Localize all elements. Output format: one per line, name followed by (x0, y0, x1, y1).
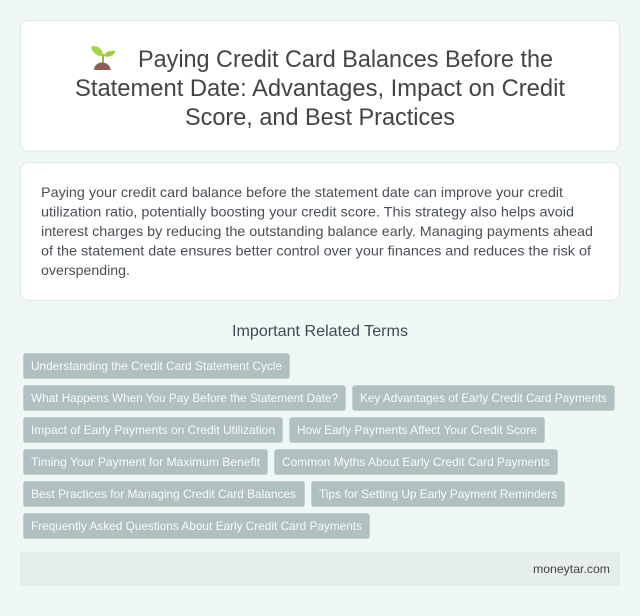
footer: moneytar.com (533, 562, 610, 576)
panel: related term tags (24, 354, 614, 538)
summary paragraph: Paying your credit card balance before the statement date can improve your credit (41, 184, 563, 200)
title: Statement Date: Advantages, Impact on Credit (75, 75, 565, 102)
tag: faq: Frequently Asked Questions About Early Credit Card Payments (31, 519, 362, 533)
summary paragraph: overspending. (41, 262, 130, 278)
tag: myths (274, 450, 558, 474)
tag: faq (24, 514, 370, 538)
summary paragraph (41, 184, 593, 278)
summary paragraph: of the statement date ensures better control over your finances and reduces the risk of (41, 242, 591, 258)
tag: timing: Timing Your Payment for Maximum Benefit (31, 455, 261, 469)
icon: seedling (91, 46, 116, 70)
tag: key advantages: Key Advantages of Early Credit Card Payments (360, 391, 607, 405)
tag: reminders (312, 482, 564, 506)
tag: reminders: Tips for Setting Up Early Payment Reminders (319, 487, 557, 501)
tag: credit score (290, 418, 544, 442)
panel: summary card (20, 162, 620, 300)
tag: best practices (24, 482, 304, 506)
tag: statement cycle: Understanding the Credit Card Statement Cycle (31, 359, 282, 373)
footer (20, 552, 620, 586)
tag: myths: Common Myths About Early Credit Card Payments (282, 455, 550, 469)
title (75, 46, 565, 131)
tag: credit utilization (24, 418, 282, 442)
panel: title card (20, 20, 620, 151)
tag: best practices: Best Practices for Managing Credit Card Balances (31, 487, 296, 501)
summary paragraph: utilization ratio, potentially boosting your credit score. This strategy also helps avoid (41, 204, 574, 220)
title: Score, and Best Practices (185, 104, 455, 131)
tag: statement cycle (24, 354, 290, 378)
tag: credit utilization: Impact of Early Payments on Credit Utilization (31, 423, 275, 437)
title: Paying Credit Card Balances Before the (138, 46, 553, 73)
tag: timing (24, 450, 268, 474)
tag: pay before statement date: What Happens When You Pay Before the Statement Date? (31, 391, 338, 405)
summary paragraph: interest charges by reducing the outstanding balance early. Managing payments ahead (41, 223, 593, 239)
tag: key advantages (352, 386, 614, 410)
heading: important related terms: Important Related Terms (232, 323, 408, 340)
tag: pay before statement date (24, 386, 346, 410)
tag: credit score: How Early Payments Affect Your Credit Score (297, 423, 537, 437)
